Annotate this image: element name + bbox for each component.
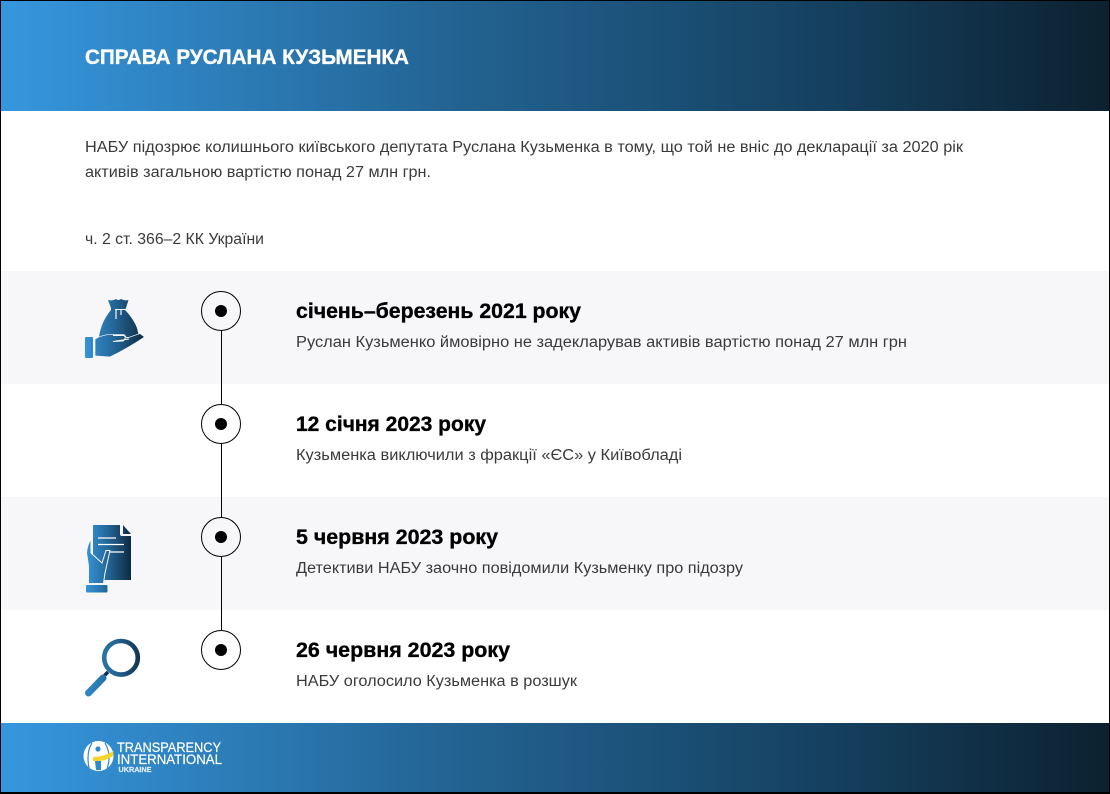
logo wordmark: TRANSPARENCY [117,740,221,755]
row 1 text [296,299,907,351]
logo emblem [84,741,114,771]
logo wordmark: UKRAINE [118,767,152,774]
row band 3 [1,497,1109,610]
row 4 text [296,638,577,690]
timeline [202,292,240,670]
icon: document in hand [86,525,131,592]
row band 1 [1,271,1109,384]
intro text [85,139,963,181]
row 4 text: 26 червня 2023 року [296,638,510,662]
header band [1,1,1109,111]
node 3 [202,518,240,556]
row 3 text: 5 червня 2023 року [296,525,498,549]
row 2 text: Кузьменка виключили з фракції «ЄС» у Київобладі [296,447,682,464]
footer band [1,723,1109,792]
icon: money bag in hand [85,299,144,358]
title: СПРАВА РУСЛАНА КУЗЬМЕНКА [85,45,409,69]
logo wordmark: INTERNATIONAL [117,752,222,767]
row 1 text: Руслан Кузьменко ймовірно не задекларував активів вартістю понад 27 млн грн [296,334,907,351]
node 2 [202,404,240,444]
row 3 text [296,525,743,577]
intro text: НАБУ підозрює колишнього київського депутата Руслана Кузьменка в тому, що той не вніс до декларації за 2020 рік [85,139,963,156]
legal article: ч. 2 ст. 366–2 КК України [85,231,264,248]
row 1 text: січень–березень 2021 року [296,299,581,323]
row 2 text [296,412,682,464]
intro text: активів загальною вартістю понад 27 млн грн. [85,164,431,181]
row 3 text: Детективи НАБУ заочно повідомили Кузьменку про підозру [296,560,743,577]
node 1 [202,292,240,330]
icon: magnifying glass [88,641,138,693]
logo [84,740,222,774]
node 4 [202,630,240,670]
row 2 text: 12 січня 2023 року [296,412,486,436]
logo wordmark [117,740,222,774]
row 4 text: НАБУ оголосило Кузьменка в розшук [296,673,577,690]
